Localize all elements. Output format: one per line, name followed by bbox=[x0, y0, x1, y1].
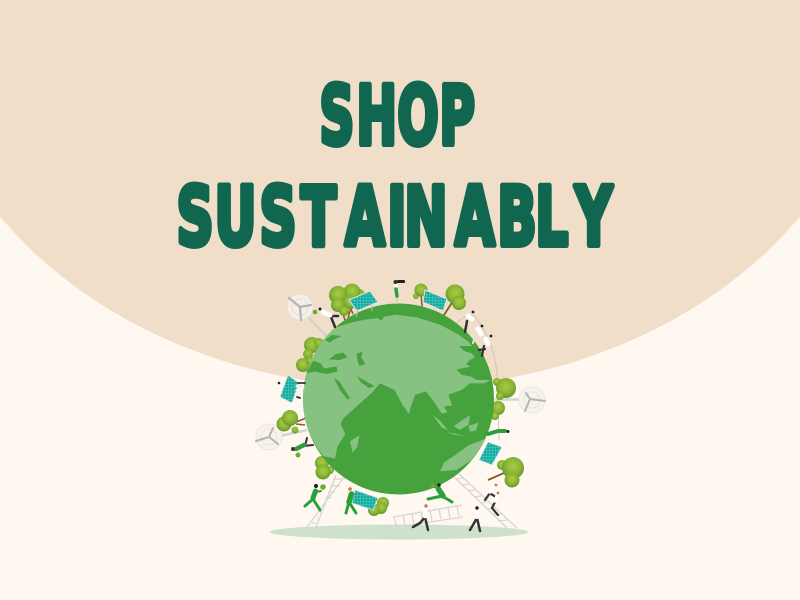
person: jumping man bbox=[428, 483, 452, 502]
continents: Eurasia and Africa bbox=[302, 315, 491, 459]
person: left climbing bbox=[291, 438, 313, 458]
person: green man with panel bbox=[346, 487, 356, 513]
islands: Madagascar, Sri Lanka, SE Asia, Australia bbox=[350, 408, 486, 471]
ladder: left bbox=[305, 473, 347, 530]
person: binoculars woman bbox=[394, 280, 405, 303]
people: three men on rope bbox=[465, 311, 492, 356]
wind turbine: left bbox=[256, 424, 307, 450]
globe bbox=[302, 304, 494, 494]
person: man carrying ladder bbox=[413, 504, 428, 530]
solar panel: bottom bbox=[352, 490, 378, 510]
title: SUSTAINABLY bbox=[176, 171, 613, 265]
solar panel: top right bbox=[423, 290, 447, 311]
solar panel: right bbox=[479, 442, 502, 465]
tree: bottom centre bbox=[368, 497, 389, 516]
tree: top right bbox=[444, 284, 466, 315]
tree: left upper bbox=[296, 337, 324, 372]
dark seas over land bbox=[306, 335, 493, 399]
rope bbox=[457, 315, 499, 440]
solar panel: top left bbox=[349, 291, 378, 317]
person: walking man bbox=[470, 506, 480, 531]
tree: bottom left bbox=[315, 456, 334, 480]
title: SHOP bbox=[319, 69, 475, 163]
tree: right upper bbox=[491, 378, 516, 420]
beige top ellipse bbox=[0, 0, 800, 388]
wind turbine: right bbox=[495, 387, 545, 413]
person: man on right ladder bbox=[485, 484, 499, 515]
ground shadow bbox=[270, 524, 528, 540]
person: man pulling, top left bbox=[313, 308, 338, 327]
tree: right lower bbox=[488, 457, 524, 488]
tree: left lower bbox=[276, 410, 306, 434]
solar panel: left bbox=[280, 375, 299, 403]
tree: top left bbox=[329, 284, 365, 320]
wind turbine: top left bbox=[287, 294, 327, 337]
person: green runner by ladder bbox=[305, 484, 326, 510]
ladder: right bbox=[450, 473, 517, 528]
ladder: carried bbox=[393, 505, 463, 527]
title bbox=[176, 69, 613, 265]
person: right climbing bbox=[488, 430, 510, 434]
tree: top centre bbox=[413, 284, 428, 307]
person: left panel man bbox=[278, 382, 305, 398]
